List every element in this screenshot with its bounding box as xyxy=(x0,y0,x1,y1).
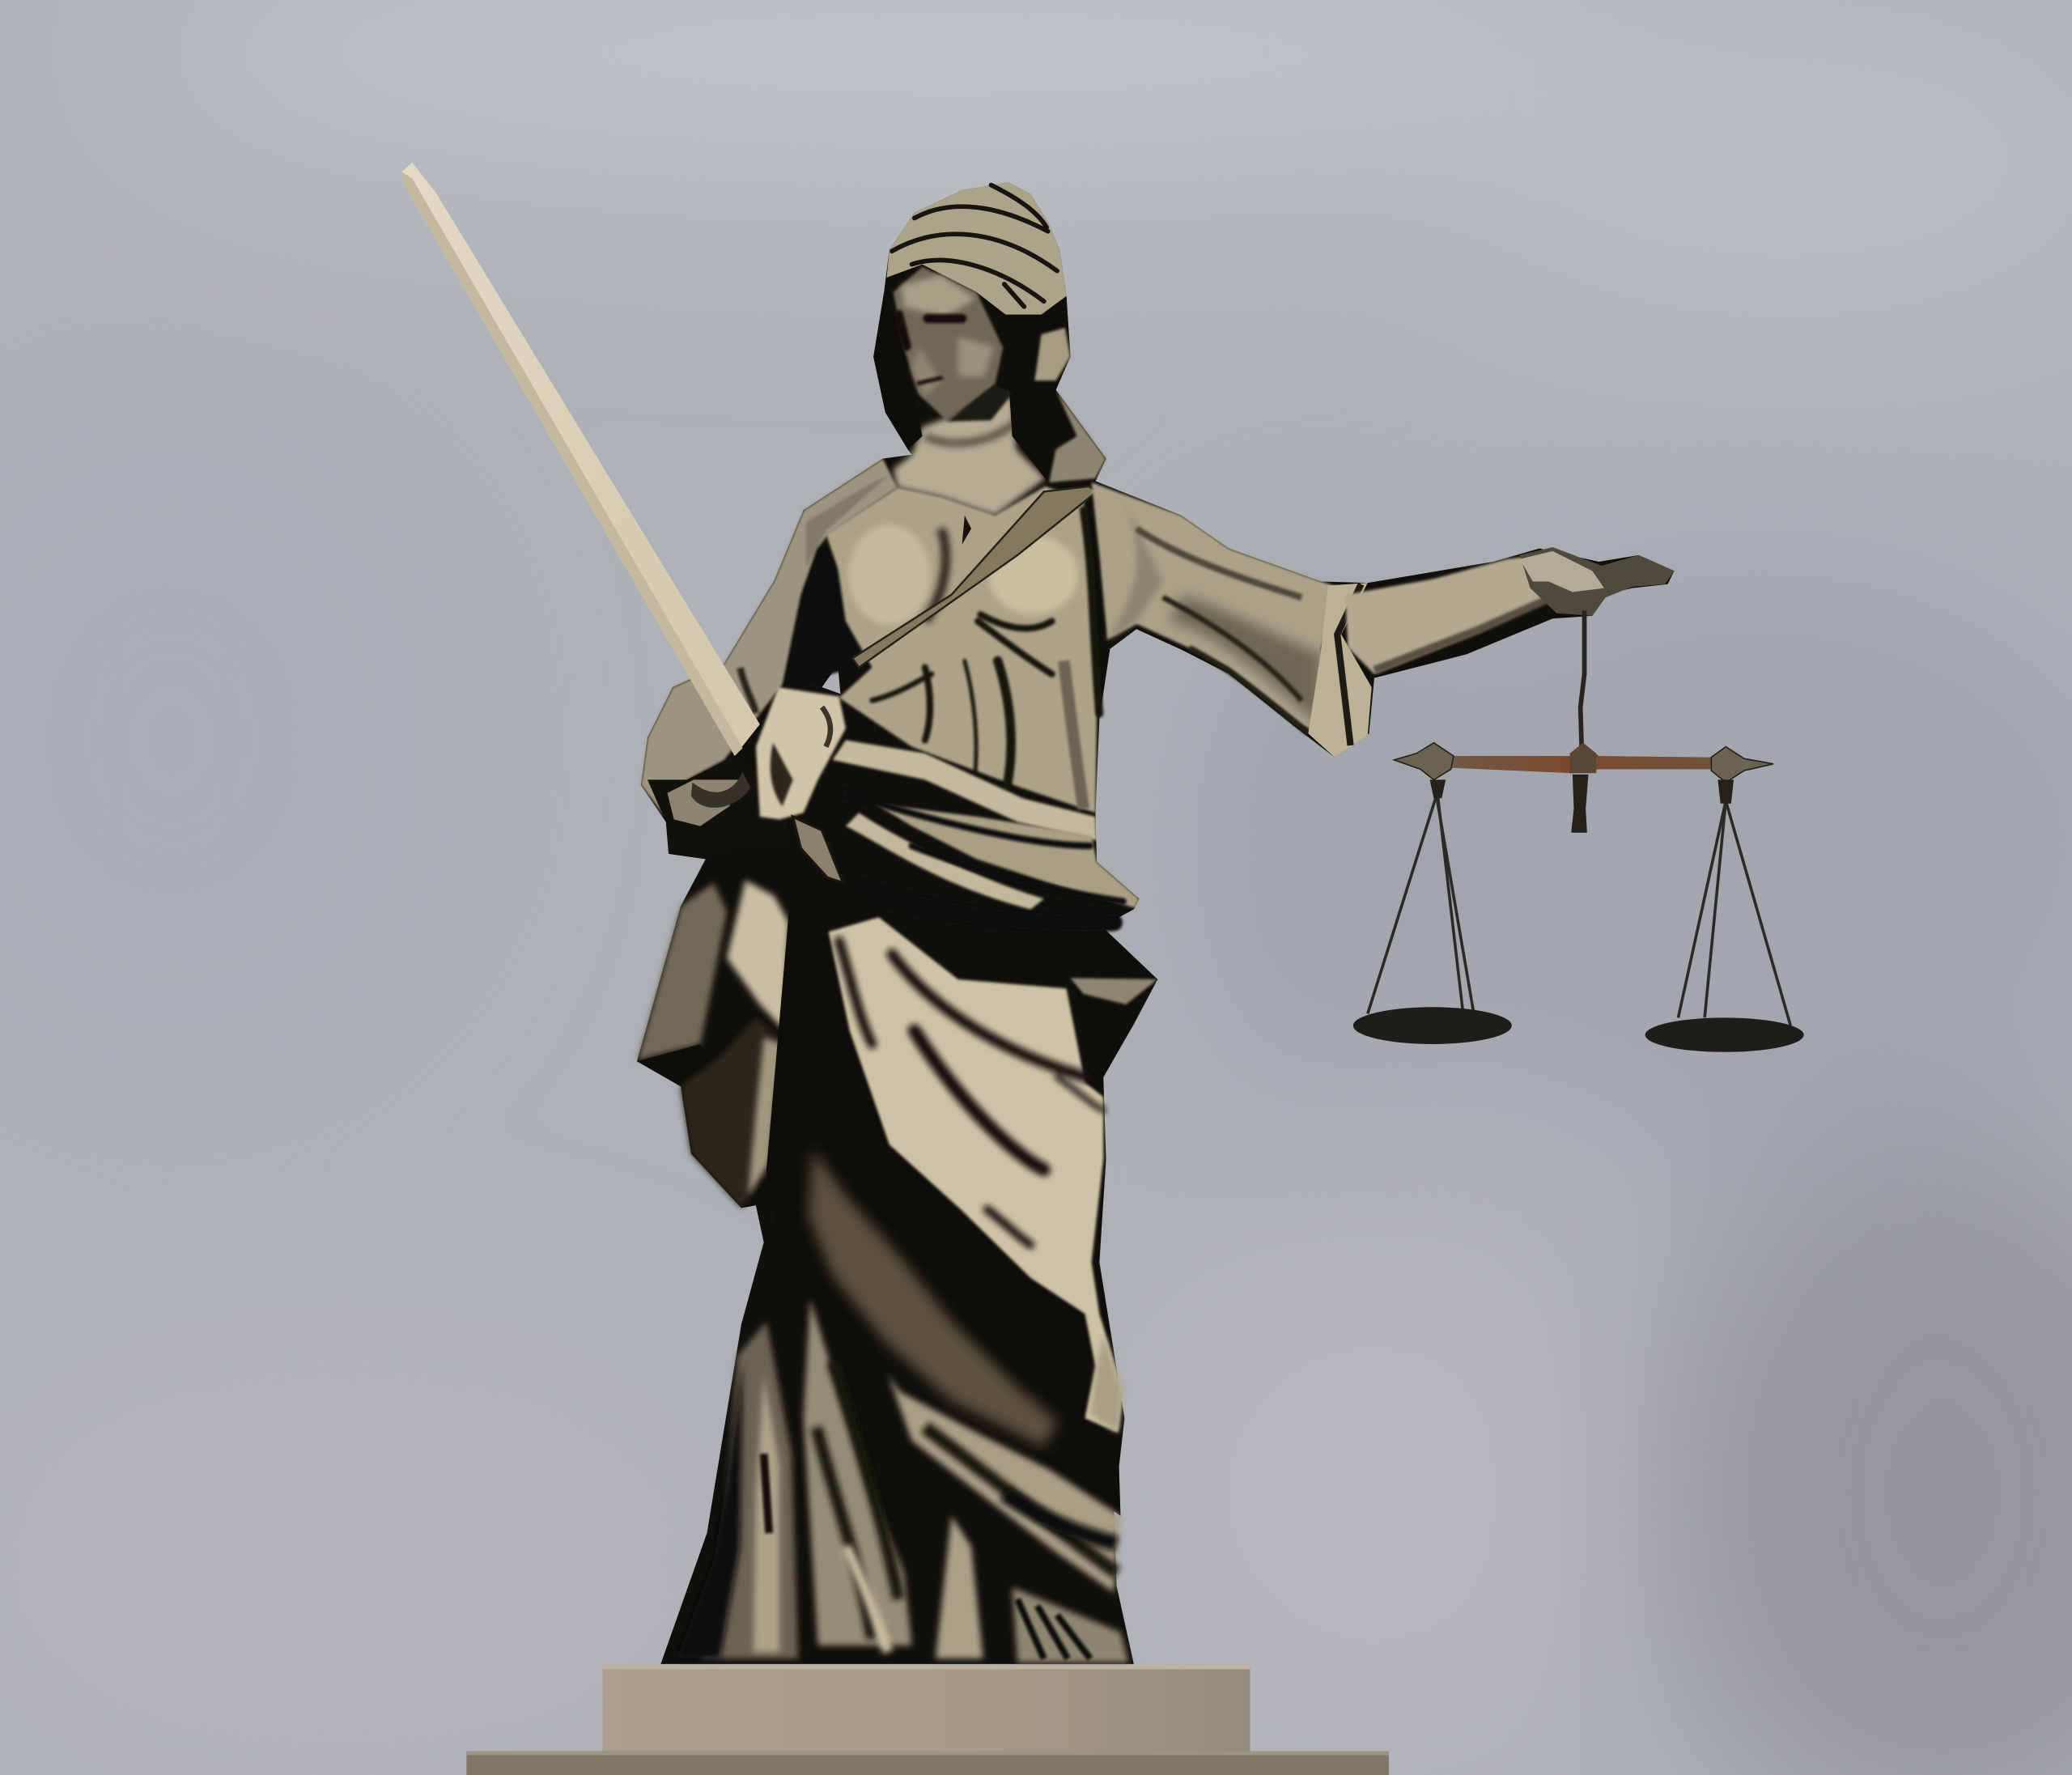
statue figure xyxy=(401,163,1675,1664)
brown shaded mid fold xyxy=(809,1150,1057,1447)
gathered cloth at hip xyxy=(756,687,846,819)
left pan strings xyxy=(1368,796,1473,1013)
armpit shadow xyxy=(785,547,868,687)
stone plinth xyxy=(466,1665,1389,1775)
hand xyxy=(1520,547,1675,616)
sleeve cuff xyxy=(1308,583,1372,758)
head xyxy=(873,182,1106,484)
lower skirt front folds xyxy=(804,1299,912,1645)
left hanging drape xyxy=(637,883,727,1061)
face xyxy=(894,267,1003,422)
veil behind the neck xyxy=(1004,296,1106,484)
lower lit diagonal band xyxy=(888,1374,1120,1593)
chest right xyxy=(988,535,1078,614)
main skirt lit panel xyxy=(829,917,1123,1433)
chest left xyxy=(848,524,930,625)
waist sash strip xyxy=(833,740,1097,841)
neck and upper chest xyxy=(894,394,1045,516)
torso shadow folds xyxy=(873,510,1099,787)
forearm xyxy=(1345,555,1552,674)
waist drape folds xyxy=(875,804,1139,908)
wrist and sword grip xyxy=(648,756,793,859)
sky gap between arm and waist xyxy=(822,665,840,694)
beam xyxy=(1420,750,1711,773)
pointer xyxy=(1571,775,1588,833)
right sleeve xyxy=(1092,482,1341,740)
right pan xyxy=(1645,1017,1804,1052)
headdress xyxy=(887,182,1067,315)
left sleeve xyxy=(641,459,898,819)
body silhouette xyxy=(637,182,1675,1664)
lower skirt left panel xyxy=(700,1322,798,1658)
sword blade xyxy=(401,163,760,756)
sash xyxy=(852,486,1097,668)
right pan strings xyxy=(1678,801,1790,1026)
sword hilt xyxy=(793,817,843,883)
left pan xyxy=(1353,1007,1512,1044)
torso cloth xyxy=(826,486,1097,813)
central shadow column xyxy=(766,912,1120,1516)
lower skirt right panels xyxy=(936,1516,983,1658)
upper-right drape point xyxy=(1077,928,1157,1077)
hair dark side xyxy=(873,292,923,449)
chain xyxy=(1581,610,1585,750)
balance scales xyxy=(1353,610,1804,1052)
skirt dark streaks xyxy=(839,941,1103,1245)
